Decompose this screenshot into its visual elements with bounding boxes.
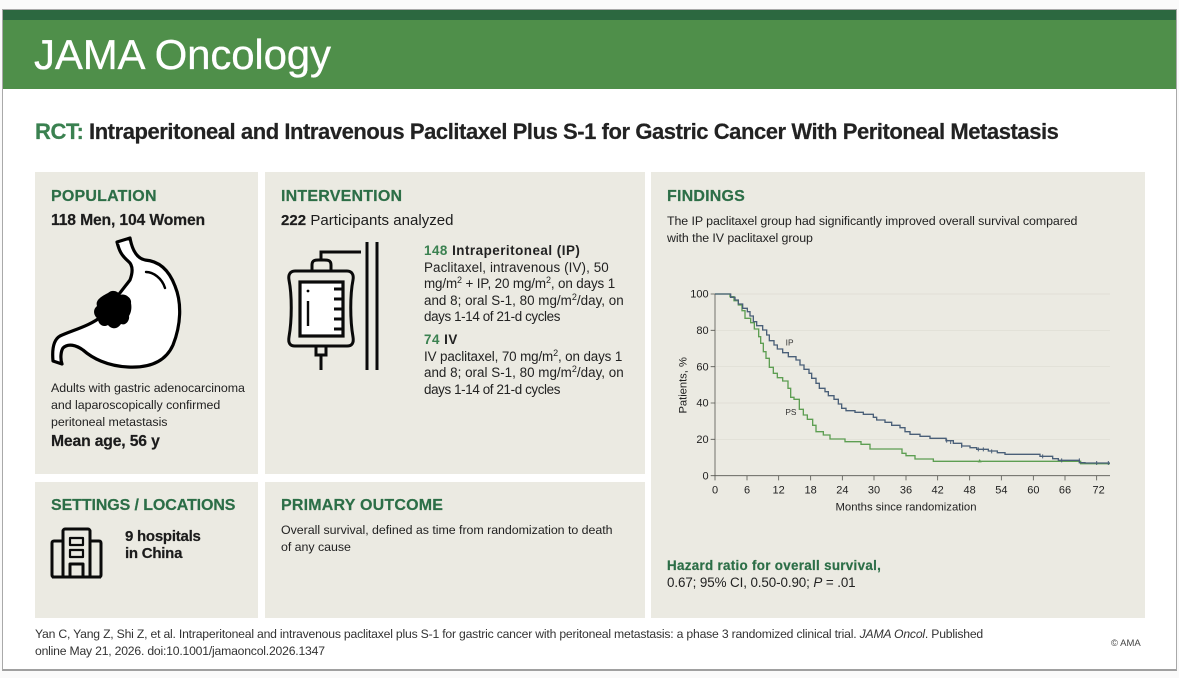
hazard ratio bbox=[667, 558, 881, 590]
population description bbox=[51, 381, 245, 429]
panel: findings bbox=[651, 172, 1145, 618]
curve: IP group bbox=[715, 294, 1110, 463]
x axis labels: 18 bbox=[805, 484, 817, 496]
copyright: © AMA bbox=[1111, 638, 1141, 649]
header dark strip bbox=[3, 10, 1176, 20]
heading: primary outcome: PRIMARY OUTCOME bbox=[281, 497, 443, 514]
x axis labels: 36 bbox=[900, 484, 912, 496]
x axis labels: 24 bbox=[836, 484, 848, 496]
hospitals count: 9 hospitals bbox=[125, 528, 201, 545]
arm 1: intraperitoneal: mg/m2 + IP, 20 mg/m2, on days 1 bbox=[424, 275, 615, 291]
arm 1: intraperitoneal: Paclitaxel, intravenous (IV), 50 bbox=[424, 260, 609, 274]
y axis labels: 80 bbox=[696, 325, 709, 337]
x axis labels: 6 bbox=[744, 484, 750, 496]
y axis labels bbox=[690, 289, 709, 482]
citation: online May 21, 2026. doi:10.1001/jamaoncol.2026.1347 bbox=[35, 644, 325, 658]
arm 1: intraperitoneal: days 1-14 of 21-d cycles bbox=[424, 309, 560, 324]
heading: settings: SETTINGS / LOCATIONS bbox=[51, 497, 235, 514]
hazard ratio: 0.67; 95% CI, 0.50-0.90; P = .01 bbox=[667, 575, 856, 590]
label: IP: IP bbox=[786, 337, 794, 347]
y axis labels: 100 bbox=[690, 289, 709, 301]
population description: peritoneal metastasis bbox=[51, 415, 167, 429]
icon: stomach with tumor bbox=[51, 236, 182, 369]
x axis labels: 72 bbox=[1093, 484, 1105, 496]
participants analyzed: 222 Participants analyzed bbox=[281, 212, 454, 229]
arm 2: intravenous: 74 IV bbox=[424, 332, 458, 347]
y axis labels: 20 bbox=[696, 434, 709, 446]
x axis labels bbox=[712, 484, 1105, 496]
population counts: 118 Men, 104 Women bbox=[51, 212, 205, 229]
arm 1: intraperitoneal: 148 Intraperitoneal (IP) bbox=[424, 243, 580, 258]
panel: settings / locations bbox=[35, 482, 258, 618]
citation: Yan C, Yang Z, Shi Z, et al. Intraperitoneal and intravenous paclitaxel plus S-1 for gastric cancer with peritoneal metastasis: a phase 3 randomized clinical trial. JAMA Oncol. Published bbox=[35, 627, 983, 641]
population description: and laparoscopically confirmed bbox=[51, 398, 220, 412]
arm 2: intravenous: and 8; oral S-1, 80 mg/m2/day, on bbox=[424, 364, 624, 380]
arm 2: intravenous: days 1-14 of 21-d cycles bbox=[424, 382, 560, 396]
hospitals count bbox=[125, 528, 201, 562]
outcome description: Overall survival, defined as time from randomization to death bbox=[281, 523, 612, 537]
panel: population bbox=[35, 172, 258, 474]
label: PS: PS bbox=[785, 407, 797, 417]
findings summary bbox=[667, 214, 1077, 245]
arm 1: intraperitoneal bbox=[424, 243, 624, 324]
x axis labels: 66 bbox=[1059, 484, 1071, 496]
y axis labels: 60 bbox=[696, 361, 709, 373]
findings summary: The IP paclitaxel group had significantly improved overall survival compared bbox=[667, 214, 1077, 228]
outcome description: of any cause bbox=[281, 540, 351, 554]
y axis labels: 0 bbox=[703, 470, 709, 482]
arm 1: intraperitoneal: and 8; oral S-1, 80 mg/m2/day, on bbox=[424, 292, 624, 308]
arm 2: intravenous bbox=[424, 332, 624, 397]
chart: survival curves bbox=[678, 289, 1110, 514]
findings summary: with the IV paclitaxel group bbox=[667, 231, 813, 245]
journal name: JAMA Oncology bbox=[34, 31, 331, 78]
censor marks bbox=[947, 439, 1108, 465]
title: RCT: Intraperitoneal and Intravenous Paclitaxel Plus S-1 for Gastric Cancer With Peritoneal Metastasis bbox=[35, 119, 1058, 144]
mean age: Mean age, 56 y bbox=[51, 433, 160, 450]
hazard ratio: Hazard ratio for overall survival, bbox=[667, 558, 881, 573]
icon: IV bag bbox=[287, 242, 378, 370]
header band bbox=[3, 10, 1176, 89]
heading: intervention: INTERVENTION bbox=[281, 188, 402, 205]
x axis labels: 42 bbox=[932, 484, 944, 496]
curve: PS group bbox=[715, 294, 1110, 464]
x axis labels: 48 bbox=[964, 484, 976, 496]
x axis labels: 30 bbox=[868, 484, 880, 496]
x axis title: Months since randomization bbox=[835, 502, 977, 514]
population description: Adults with gastric adenocarcinoma bbox=[51, 381, 245, 395]
axes bbox=[711, 294, 1110, 480]
arm 2: intravenous: IV paclitaxel, 70 mg/m2, on days 1 bbox=[424, 348, 622, 364]
panel: primary outcome bbox=[265, 482, 645, 618]
icon: hospital building bbox=[50, 528, 102, 578]
heading: population: POPULATION bbox=[51, 188, 157, 205]
citation bbox=[35, 627, 983, 658]
y axis title: Patients, % bbox=[678, 357, 690, 414]
x axis labels: 12 bbox=[773, 484, 785, 496]
outcome description bbox=[281, 523, 612, 554]
marker: PS censor bbox=[978, 459, 982, 462]
x axis labels: 54 bbox=[995, 484, 1007, 496]
panel: intervention bbox=[265, 172, 645, 474]
x axis labels: 60 bbox=[1027, 484, 1039, 496]
hospitals count: in China bbox=[125, 544, 182, 562]
y axis labels: 40 bbox=[696, 398, 709, 410]
x axis labels: 0 bbox=[712, 484, 718, 496]
heading: findings: FINDINGS bbox=[667, 188, 745, 205]
